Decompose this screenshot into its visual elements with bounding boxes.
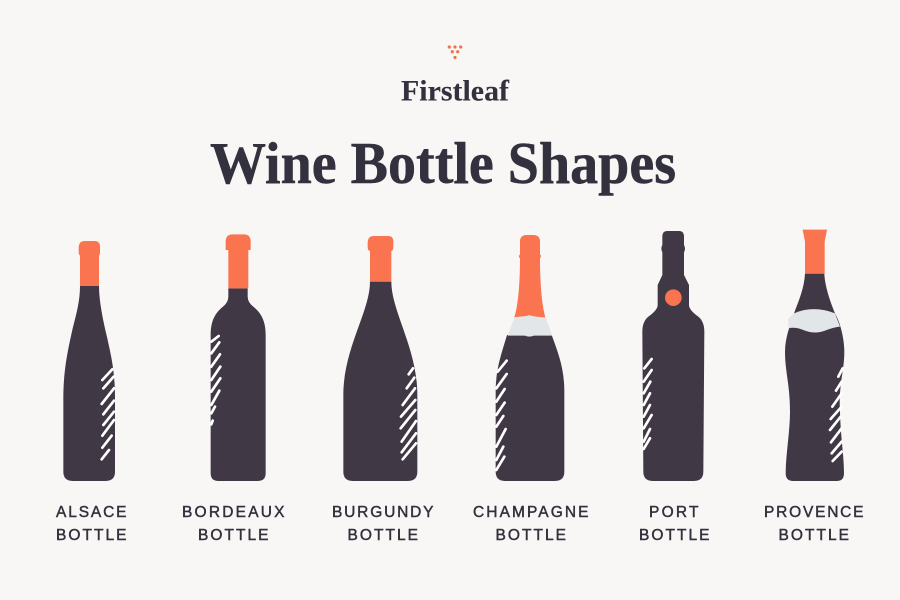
capsule	[514, 235, 546, 318]
highlight	[496, 361, 507, 470]
highlight	[644, 359, 652, 449]
capsule	[803, 230, 827, 274]
highlight	[102, 369, 114, 459]
label: Alsace bottle: BOTTLE	[56, 527, 126, 544]
highlight	[211, 336, 220, 424]
brand name: Firstleaf	[401, 74, 510, 108]
bottle: Burgundy	[343, 236, 417, 481]
glass	[496, 335, 564, 481]
icon: grape cluster logo	[448, 45, 462, 59]
label: Bordeaux bottle: BOTTLE	[198, 527, 268, 544]
label: Alsace bottle: ALSACE	[56, 504, 126, 521]
foil band	[788, 309, 840, 332]
bottle: Port	[642, 231, 704, 481]
capsule	[368, 236, 393, 282]
label: Burgundy bottle	[332, 504, 434, 544]
label: Port bottle: BOTTLE	[639, 527, 710, 544]
label: Provence bottle	[764, 504, 864, 544]
capsule	[79, 241, 100, 286]
label: Champagne bottle: CHAMPAGNE	[473, 504, 588, 521]
label: Burgundy bottle: BURGUNDY	[332, 504, 434, 521]
label: Bordeaux bottle: BORDEAUX	[182, 504, 285, 521]
label: Alsace bottle	[56, 504, 126, 544]
capsule	[226, 234, 251, 288]
label: Bordeaux bottle	[182, 504, 285, 544]
bottle: Bordeaux	[211, 234, 266, 481]
label: Champagne bottle: BOTTLE	[496, 527, 566, 544]
bottle: Champagne	[496, 235, 564, 481]
foil band	[508, 315, 552, 337]
title: Wine Bottle Shapes	[210, 130, 676, 196]
label: Provence bottle: BOTTLE	[778, 527, 849, 544]
glass	[211, 288, 266, 481]
label: Port bottle: PORT	[649, 504, 699, 521]
glass	[343, 282, 417, 481]
highlight	[830, 368, 843, 461]
glass	[785, 274, 844, 481]
bottle: Provence	[785, 230, 844, 481]
glass	[63, 286, 115, 481]
label: Port bottle	[639, 504, 710, 544]
highlight	[401, 368, 416, 459]
label: Provence bottle: PROVENCE	[764, 504, 864, 521]
bottle: Alsace	[63, 241, 115, 481]
seal	[665, 289, 682, 306]
label: Champagne bottle	[473, 504, 588, 544]
glass	[642, 231, 704, 481]
label: Burgundy bottle: BOTTLE	[348, 527, 418, 544]
